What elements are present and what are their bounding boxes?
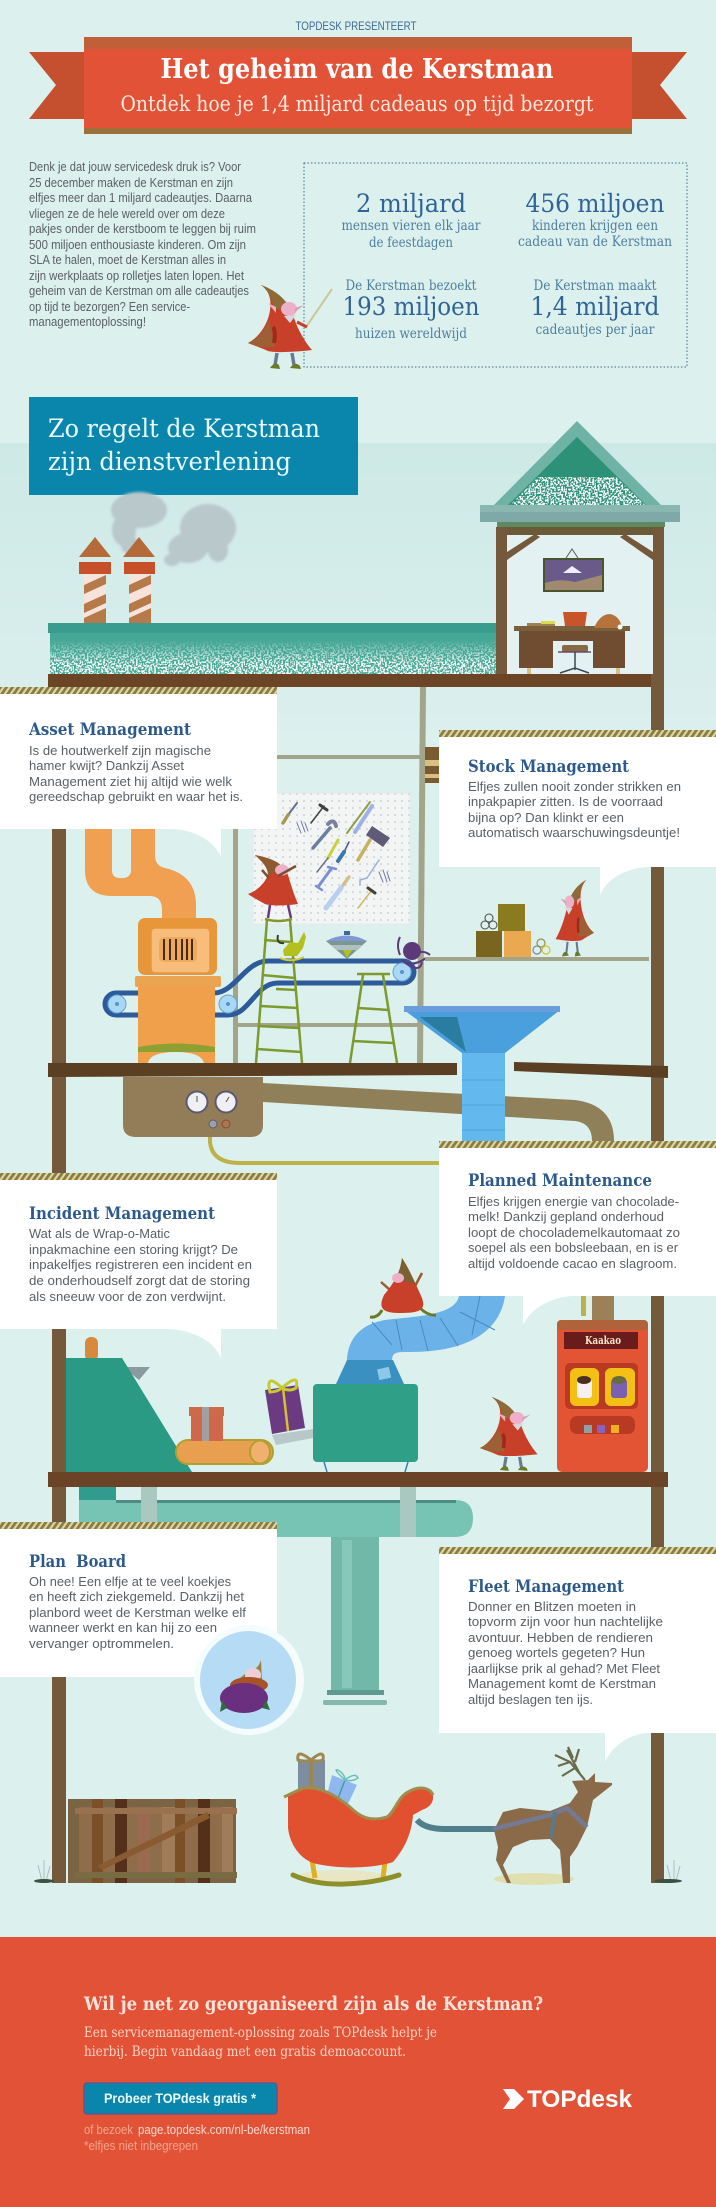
ladder — [256, 919, 302, 1063]
funnel — [404, 1006, 560, 1141]
stat: 1,4 miljard: cadeautjes per jaar — [536, 322, 655, 338]
second floor beam — [48, 1062, 668, 1078]
panel: Stock Management: automatisch waarschuwingsdeuntje! — [468, 825, 680, 840]
panel: Incident Management: inpakelfjes registreren een incident en — [29, 1257, 252, 1272]
link line: of bezoek — [84, 2123, 134, 2137]
stat: 193 miljoen — [342, 278, 480, 342]
right wooden post — [651, 674, 664, 1883]
stat: 2 miljard: 2 miljard — [356, 189, 466, 218]
machine label: Kaakao — [585, 1334, 621, 1347]
elf on ladder — [248, 855, 298, 918]
Kaakao machine — [557, 1296, 648, 1472]
stat: 456 miljoen: cadeau van de Kerstman — [518, 234, 672, 250]
panel: Plan Board — [0, 1522, 277, 1677]
panel: Fleet Management: topvorm zijn voor hun nachtelijke — [468, 1614, 663, 1629]
stat: 1,4 miljard — [530, 278, 660, 338]
panel: Asset Management — [0, 687, 277, 857]
cup panel — [565, 1363, 638, 1409]
stat: 1,4 miljard: De Kerstman maakt — [534, 278, 657, 294]
panel: Fleet Management: Donner en Blitzen moeten in — [468, 1599, 636, 1614]
stat: 2 miljard: mensen vieren elk jaar — [342, 218, 481, 234]
stat: 193 miljoen: huizen wereldwijd — [355, 326, 467, 342]
house roof — [480, 421, 680, 527]
intro text: op tijd te bezorgen? Een service- — [29, 299, 190, 314]
reindeer — [493, 1747, 612, 1883]
sleigh with presents — [284, 1754, 433, 1884]
intro text: geheim van de Kerstman om alle cadeautjes — [29, 283, 249, 298]
grass tufts — [34, 1860, 682, 1883]
background band — [0, 443, 716, 743]
stat: 456 miljoen: 456 miljoen — [526, 189, 664, 218]
toy horse — [278, 932, 306, 960]
panel: Planned Maintenance: Elfjes krijgen energie van chocolade- — [468, 1194, 679, 1209]
wrapping machine — [66, 1337, 192, 1472]
chimney left — [79, 537, 111, 623]
section heading box — [29, 397, 358, 495]
panel: Planned Maintenance: loopt de chocolademelkautomaat zo — [468, 1225, 680, 1240]
panel: Incident Management: als sneeuw voor de zon verdwijnt. — [29, 1289, 226, 1304]
elf on shelf — [556, 880, 594, 956]
footer heading: Wil je net zo georganiseerd zijn als de Kerstman? — [83, 1993, 543, 2015]
panel: Asset Management: Is de houtwerkelf zijn magische — [29, 743, 211, 758]
panel: Incident Management: de onderhoudself zorgt dat de storing — [29, 1273, 250, 1288]
green tank — [79, 1487, 473, 1537]
panel: Asset Management: gereedschap gebruikt en waar het is. — [29, 789, 243, 804]
panel: Fleet Management: jaarlijkse prik al gehad? Met Fleet — [467, 1661, 660, 1676]
control box — [123, 1077, 263, 1137]
intro text: managementoplossing! — [29, 314, 146, 329]
pipe to furnace — [85, 825, 196, 930]
subtitle: Ontdek hoe je 1,4 miljard cadeaus op tijd bezorgt — [120, 92, 594, 116]
chimneys — [79, 537, 155, 623]
call to action button: Probeer TOPdesk gratis * — [104, 2090, 256, 2106]
panel: Plan Board: wanneer werkt en kan hij zo een — [28, 1620, 217, 1635]
stool — [350, 974, 397, 1063]
stat: 193 miljoen: 193 miljoen — [342, 292, 480, 321]
intro text: zijn werkplaats op rolletjes laten lopen. Het — [29, 268, 244, 283]
conveyor belt — [105, 961, 414, 1015]
machine box — [313, 1360, 418, 1472]
panel: Plan Board: Oh nee! Een elfje at te veel koekjes — [29, 1574, 231, 1589]
stat: 2 miljard: de feestdagen — [369, 235, 453, 251]
panel: Planned Maintenance: soepel als een bobsleebaan, en is er — [468, 1240, 679, 1255]
panel: Asset Management: hamer kwijt? Dankzij Asset — [29, 758, 184, 773]
blue duct — [347, 1296, 505, 1362]
furnace — [135, 918, 221, 1063]
elf on duct — [370, 1258, 436, 1317]
stats box — [304, 163, 687, 367]
panel: Stock Management: Stock Management — [468, 757, 629, 777]
TOPdesk logo: TOPdesk — [527, 2086, 633, 2113]
framed picture — [543, 549, 604, 592]
intro text: SLA te halen, moet de Kerstman alles in — [29, 252, 226, 267]
section heading box: zijn dienstverlening — [48, 447, 291, 476]
chimney smoke — [111, 492, 236, 566]
panel: Asset Management: Management ziet hij altijd wie welk — [29, 774, 232, 789]
chimney right — [123, 537, 155, 623]
roller conveyor with present — [176, 1407, 273, 1464]
panel: Planned Maintenance: melk! Dankzij gepland onderhoud — [468, 1209, 664, 1224]
stat: 193 miljoen: De Kerstman bezoekt — [346, 278, 477, 294]
footer text — [84, 2025, 437, 2060]
vertical teal pipe — [323, 1537, 387, 1705]
gauges — [186, 1092, 236, 1112]
panel: Plan Board: en heeft zich ziekgemeld. Dankzij het — [29, 1589, 244, 1604]
footer text: Een servicemanagement-oplossing zoals TOPdesk helpt je — [84, 2025, 437, 2041]
section heading box: Zo regelt de Kerstman — [48, 414, 320, 443]
footer text: hierbij. Begin vandaag met een gratis demoaccount. — [84, 2044, 406, 2060]
shelf with boxes — [425, 904, 649, 961]
reins — [417, 1820, 497, 1829]
panel: Fleet Management: altijd beslagen ten ijs. — [468, 1692, 593, 1707]
crate — [68, 1799, 237, 1883]
presents — [298, 1754, 358, 1808]
stat: 1,4 miljard: 1,4 miljard — [530, 292, 660, 321]
stat: 2 miljard — [342, 189, 481, 251]
desk with items — [514, 612, 630, 674]
panel: Planned Maintenance: Planned Maintenance — [468, 1171, 652, 1191]
panel: Fleet Management: genoeg wortels gegeten? Hun — [468, 1645, 645, 1660]
panel: Planned Maintenance: altijd voldoende cacao en slagroom. — [468, 1256, 677, 1271]
elf with pointer — [248, 285, 332, 369]
call to action button — [84, 2083, 277, 2114]
thin scaffold — [233, 687, 426, 1063]
panel: Incident Management: Wat als de Wrap-o-Matic — [29, 1226, 170, 1241]
stat: 456 miljoen — [518, 189, 672, 250]
panel: Fleet Management: avontuur. Hebben de rendieren — [468, 1630, 653, 1645]
control box pipe — [263, 1083, 614, 1141]
intro text: 25 december maken de Kerstman en zijn — [29, 175, 233, 190]
octopus — [398, 937, 430, 968]
yellow cable — [210, 1137, 440, 1163]
tool pegboard — [253, 793, 410, 924]
present red — [189, 1407, 224, 1441]
panel: Stock Management: Elfjes zullen nooit zonder strikken en — [468, 779, 681, 794]
wood joint — [425, 747, 439, 783]
tools — [283, 802, 390, 908]
elf by vending machine — [480, 1397, 538, 1471]
roof slab with snow — [48, 623, 518, 674]
panel: Plan Board: vervanger optrommelen. — [29, 1636, 174, 1651]
panel: Incident Management: inpakmachine een storing krijgt? De — [29, 1242, 238, 1257]
third floor beam — [48, 1472, 668, 1487]
footer — [0, 1937, 716, 2207]
link line: page.topdesk.com/nl-be/kerstman — [138, 2123, 310, 2137]
main title: Het geheim van de Kerstman — [160, 54, 554, 85]
left wooden post — [52, 687, 66, 1883]
panel: Fleet Management — [439, 1547, 716, 1762]
house — [480, 421, 680, 674]
panel: Fleet Management: Management komt de Kerstman — [468, 1676, 656, 1691]
panel: Stock Management — [439, 730, 716, 895]
stat: 456 miljoen: kinderen krijgen een — [532, 218, 658, 234]
title banner — [29, 37, 687, 134]
intro text: elfjes meer dan 1 miljard cadeautjes. Daarna — [29, 190, 253, 205]
intro text: vliegen ze de hele wereld over om deze — [29, 206, 225, 221]
panel: Plan Board: Plan Board — [29, 1552, 126, 1572]
eyebrow: TOPdesk presenteert: TOPDESK PRESENTEERT — [296, 19, 417, 33]
panel: Asset Management: Asset Management — [28, 720, 191, 740]
intro text: pakjes onder de kerstboom te leggen bij ruim — [29, 221, 256, 236]
panel: Stock Management: inpakpapier zitten. Is de voorraad — [468, 794, 663, 809]
spinning top — [326, 931, 367, 959]
panel: Plan Board: planbord weet de Kerstman welke elf — [29, 1605, 246, 1620]
intro text — [29, 159, 256, 329]
intro text: 500 miljoen enthousiaste kinderen. Om zijn — [29, 237, 246, 252]
sick elf circle — [194, 1625, 304, 1735]
top floor beam — [48, 674, 662, 687]
panel: Incident Management — [0, 1173, 277, 1358]
sick elf — [220, 1660, 270, 1713]
disclaimer: *elfjes niet inbegrepen — [84, 2139, 198, 2153]
present purple — [265, 1380, 313, 1445]
panel: Stock Management: bijna op? Dan klinkt er een — [468, 810, 624, 825]
panel: Fleet Management: Fleet Management — [468, 1577, 624, 1597]
panel: Incident Management: Incident Management — [29, 1204, 215, 1224]
intro text: Denk je dat jouw servicedesk druk is? Voor — [29, 159, 242, 174]
small cups — [570, 1416, 635, 1434]
hay — [494, 1873, 574, 1885]
panel: Planned Maintenance — [439, 1141, 716, 1325]
